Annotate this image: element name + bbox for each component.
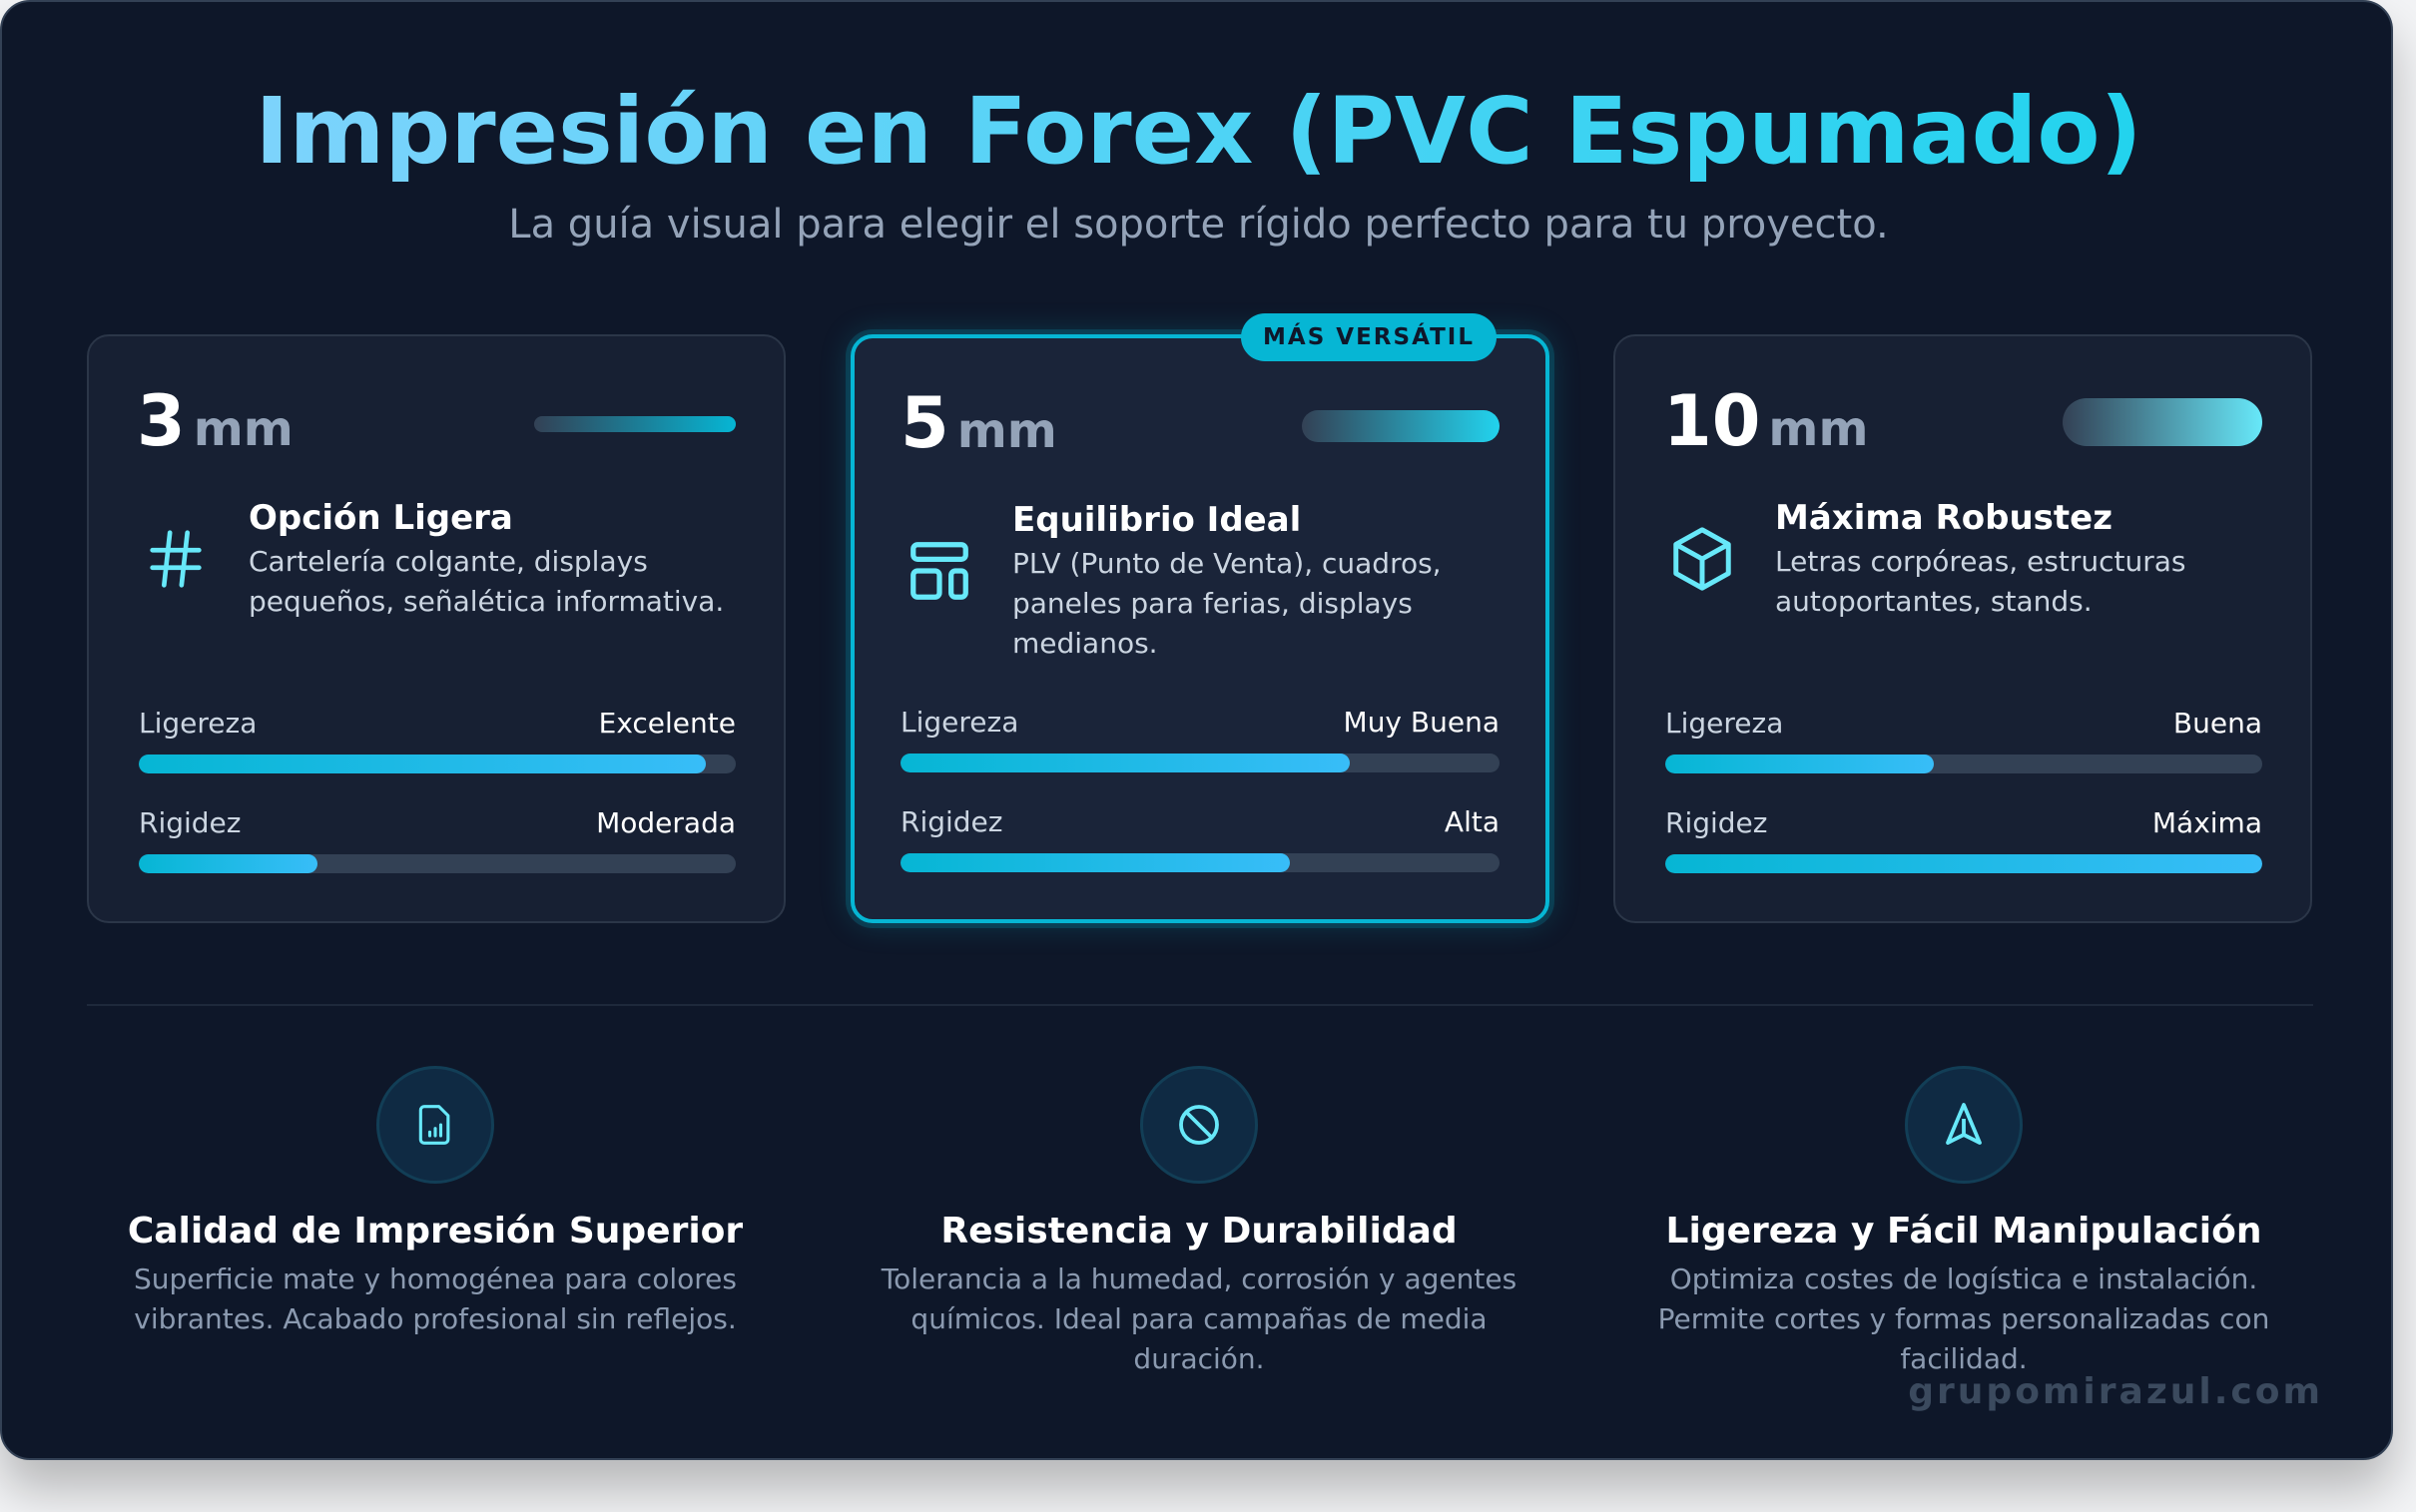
feature: resistencia [881,1066,1516,1375]
icon: arrow [1905,1066,2023,1184]
thickness 10mm: 10mm [1663,380,1868,462]
metric rigidez: Máxima [2152,806,2262,839]
icon: hash [150,530,202,588]
icon: document chart [376,1066,494,1184]
text: Opción Ligera: Cartelería colgante, displays pequeños, señalética informativa. [249,545,724,618]
watermark: grupomirazul.com [1908,1371,2323,1412]
metric ligereza [901,706,1500,739]
feature: calidad: Superficie mate y homogénea para colores vibrantes. Acabado profesional sin reflejos. [134,1262,737,1335]
subtitle: La guía visual para elegir el soporte rígido perfecto para tu proyecto. [508,202,1889,248]
metric rigidez [1665,806,2262,839]
card: 10mm [1613,334,2312,923]
text: Equilibrio Ideal: Equilibrio Ideal [1012,500,1301,540]
thickness bar [2063,398,2262,446]
text: Máxima Robustez: Letras corpóreas, estructuras autoportantes, stands. [1775,545,2186,618]
feature: calidad [128,1066,743,1335]
metric rigidez: Rigidez [139,806,241,839]
metric rigidez [901,805,1500,838]
thickness 5mm: 5mm [901,382,1057,464]
thickness 3mm: 3mm [137,380,294,462]
text: Opción Ligera: Opción Ligera [249,498,513,538]
metric rigidez: Moderada [596,806,736,839]
metric ligereza [139,707,736,740]
card: 5mm highlighted [851,334,1549,923]
feature: resistencia: Tolerancia a la humedad, corrosión y agentes químicos. Ideal para campañas de media duración. [882,1262,1516,1375]
icon: layout [910,542,968,600]
feature: ligereza: Optimiza costes de logística e instalación. Permite cortes y formas personalizadas con facilidad. [1658,1262,2269,1375]
title: Impresión en Forex (PVC Espumado) [255,78,2142,185]
metric rigidez: Rigidez [1665,806,1767,839]
badge: MÁS VERSÁTIL [1263,324,1475,350]
thickness bar [1302,410,1500,442]
metric ligereza: Buena [2173,707,2262,740]
metric ligereza: Ligereza [139,707,257,740]
icon: ban [1140,1066,1258,1184]
metric ligereza: Muy Buena [1344,706,1500,739]
thickness bar [534,416,736,432]
metric rigidez: Alta [1445,805,1500,838]
metric rigidez: Rigidez [901,805,1002,838]
feature: ligereza [1658,1066,2269,1375]
text: Opción Ligera [249,498,724,618]
text: Máxima Robustez: Máxima Robustez [1775,498,2113,538]
icon: cube [1673,527,1731,591]
feature: calidad: Calidad de Impresión Superior [128,1211,743,1252]
card: 3mm [87,334,786,923]
metric rigidez [139,806,736,839]
feature: resistencia: Resistencia y Durabilidad [940,1211,1458,1252]
metric ligereza: Ligereza [901,706,1018,739]
badge [1241,313,1497,361]
text: Máxima Robustez [1775,498,2186,618]
metric ligereza [1665,707,2262,740]
metric ligereza: Excelente [599,707,736,740]
text: Equilibrio Ideal: PLV (Punto de Venta), cuadros, paneles para ferias, displays medianos. [1012,547,1442,660]
metric ligereza: Ligereza [1665,707,1783,740]
feature: ligereza: Ligereza y Fácil Manipulación [1666,1211,2261,1252]
